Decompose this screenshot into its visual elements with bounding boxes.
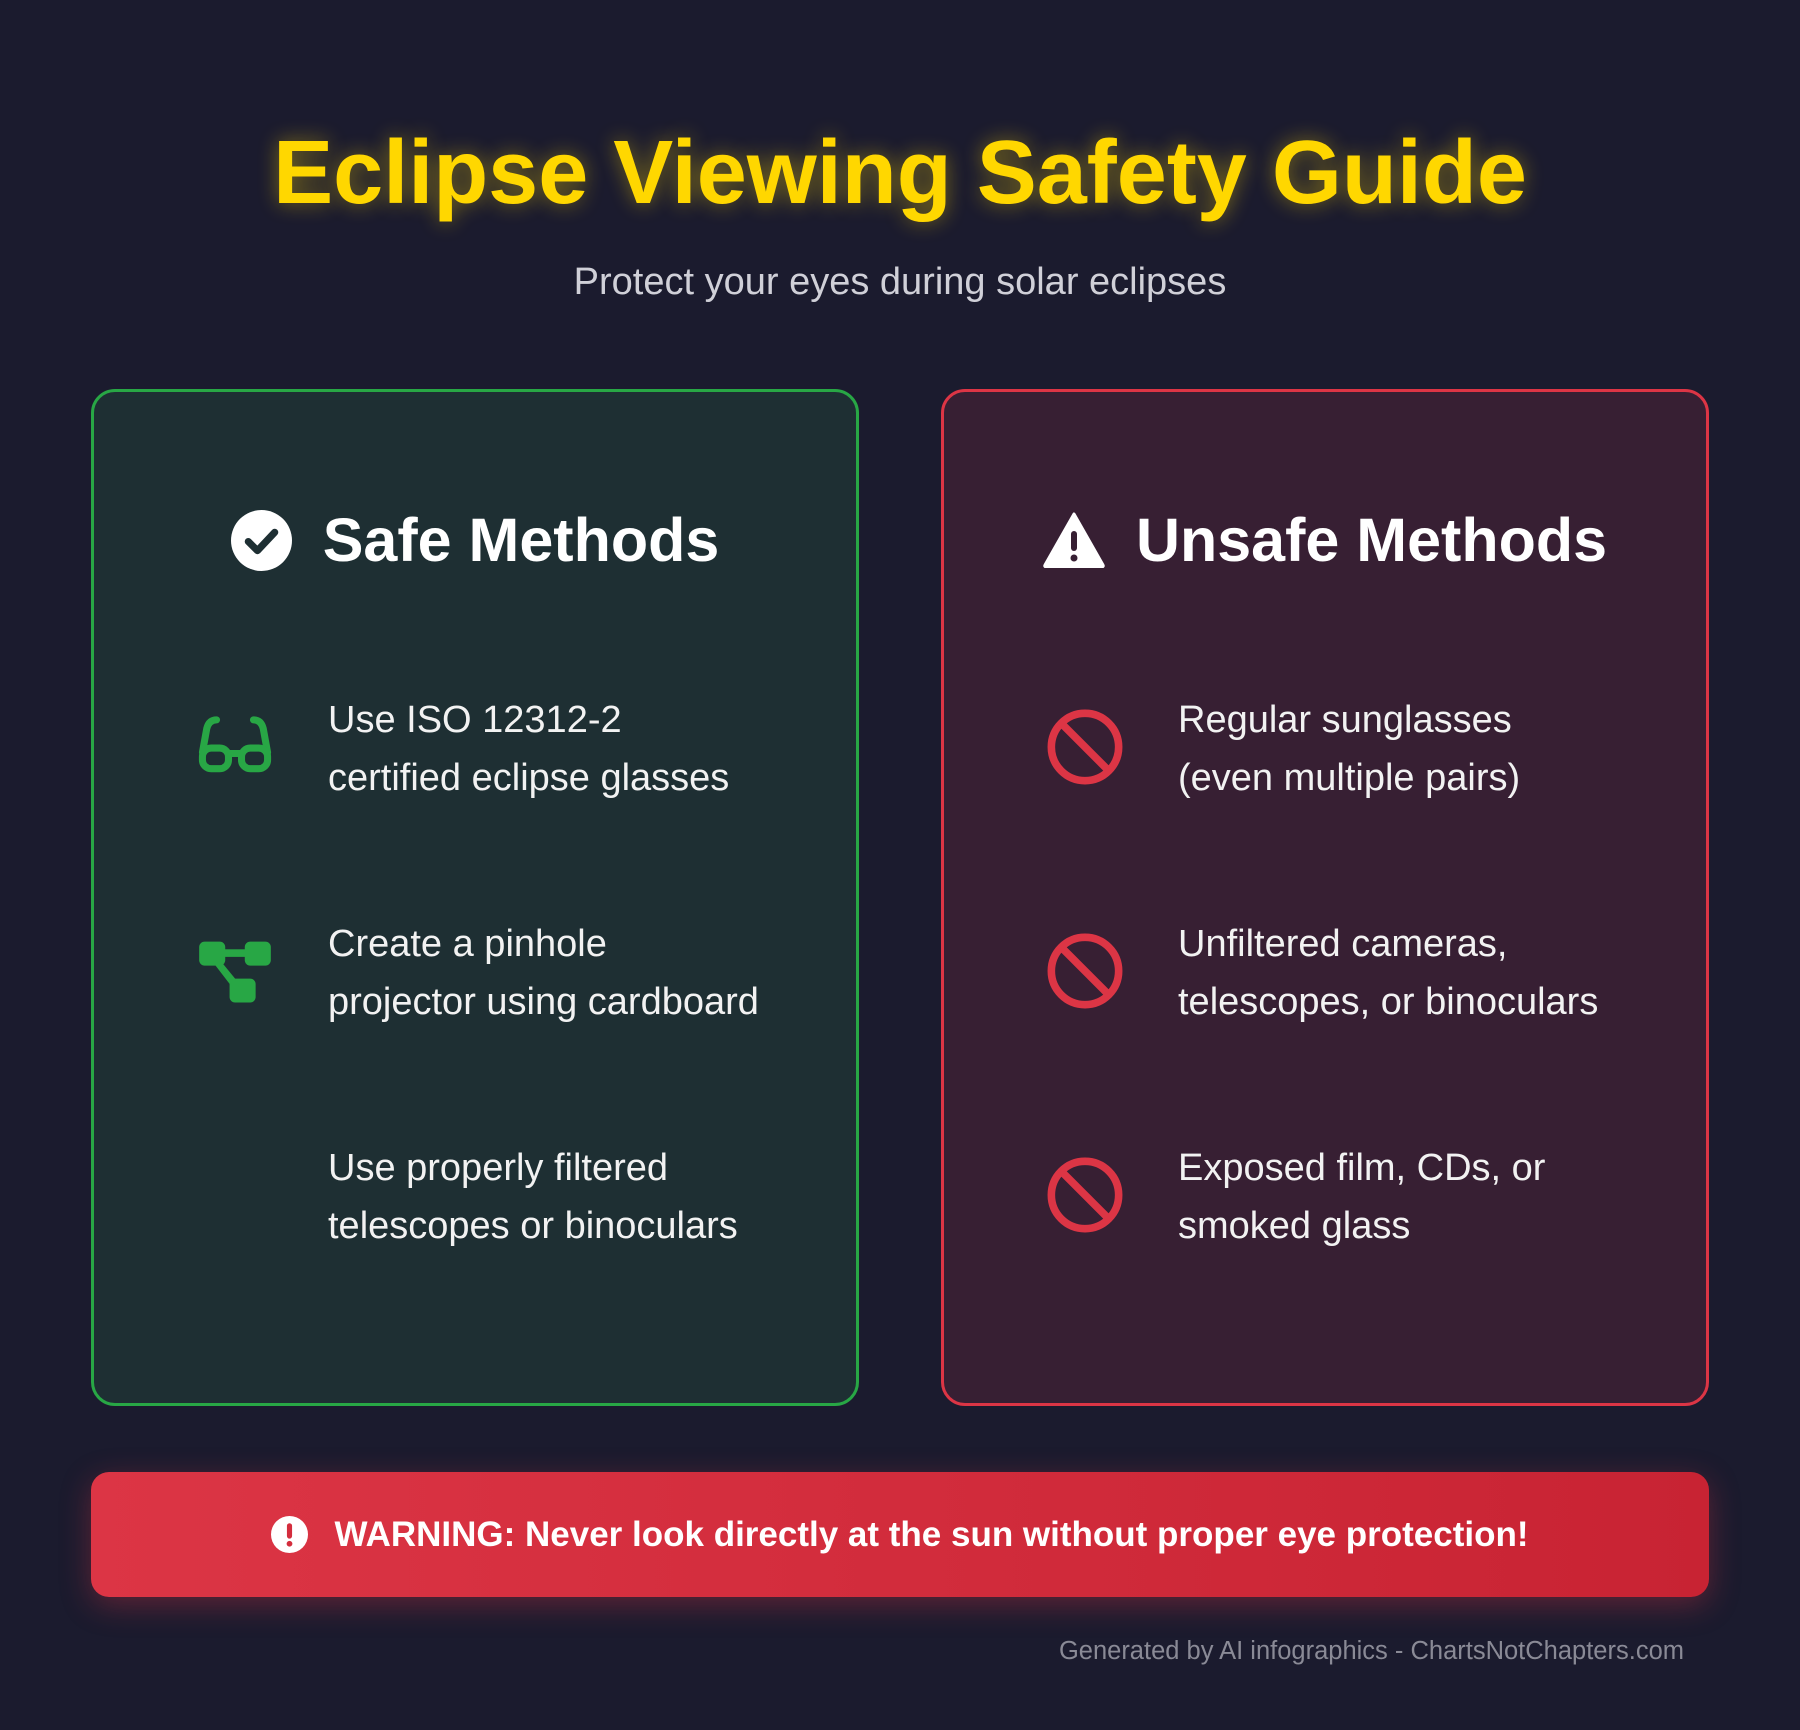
item: unfiltered optics: [1048, 923, 1598, 1023]
item: filtered telescopes: Use properly filtered: [328, 1147, 668, 1189]
item: eclipse glasses: Use ISO 12312-2: [328, 699, 622, 741]
panel: unsafe methods: [941, 389, 1709, 1406]
title: Eclipse Viewing Safety Guide: [273, 123, 1527, 223]
item: eclipse glasses: certified eclipse glasses: [328, 757, 729, 799]
item: pinhole projector: Create a pinhole: [328, 923, 607, 965]
icon: glasses: [198, 716, 272, 772]
item: pinhole projector: projector using cardboard: [328, 981, 759, 1023]
item: unfiltered optics: Unfiltered cameras,: [1178, 923, 1507, 965]
item: film and CDs: [1048, 1147, 1545, 1247]
subtitle: Protect your eyes during solar eclipses: [574, 261, 1226, 303]
item: eclipse glasses: [198, 699, 729, 799]
heading: safe methods: Safe Methods: [323, 506, 719, 574]
item: unfiltered optics: telescopes, or binoculars: [1178, 981, 1598, 1023]
item: film and CDs: smoked glass: [1178, 1205, 1410, 1247]
panel: safe methods: [91, 389, 859, 1406]
warning banner: WARNING: Never look directly at the sun without proper eye protection!: [334, 1514, 1529, 1554]
item: sunglasses: [1048, 699, 1520, 799]
warning banner: [91, 1472, 1709, 1597]
item: sunglasses: Regular sunglasses: [1178, 699, 1512, 741]
icon: ban: [1048, 934, 1122, 1008]
item: film and CDs: Exposed film, CDs, or: [1178, 1147, 1545, 1189]
item: pinhole projector: [199, 923, 759, 1023]
icon: pinhole diagram: [199, 942, 271, 1002]
item: filtered telescopes: telescopes or binoculars: [328, 1205, 738, 1247]
item: filtered telescopes: [328, 1147, 738, 1247]
item: sunglasses: (even multiple pairs): [1178, 757, 1520, 799]
heading: unsafe methods: Unsafe Methods: [1136, 506, 1607, 574]
icon: ban: [1048, 1158, 1122, 1232]
footer credit: Generated by AI infographics - ChartsNotChapters.com: [1059, 1637, 1684, 1665]
icon: ban: [1048, 710, 1122, 784]
